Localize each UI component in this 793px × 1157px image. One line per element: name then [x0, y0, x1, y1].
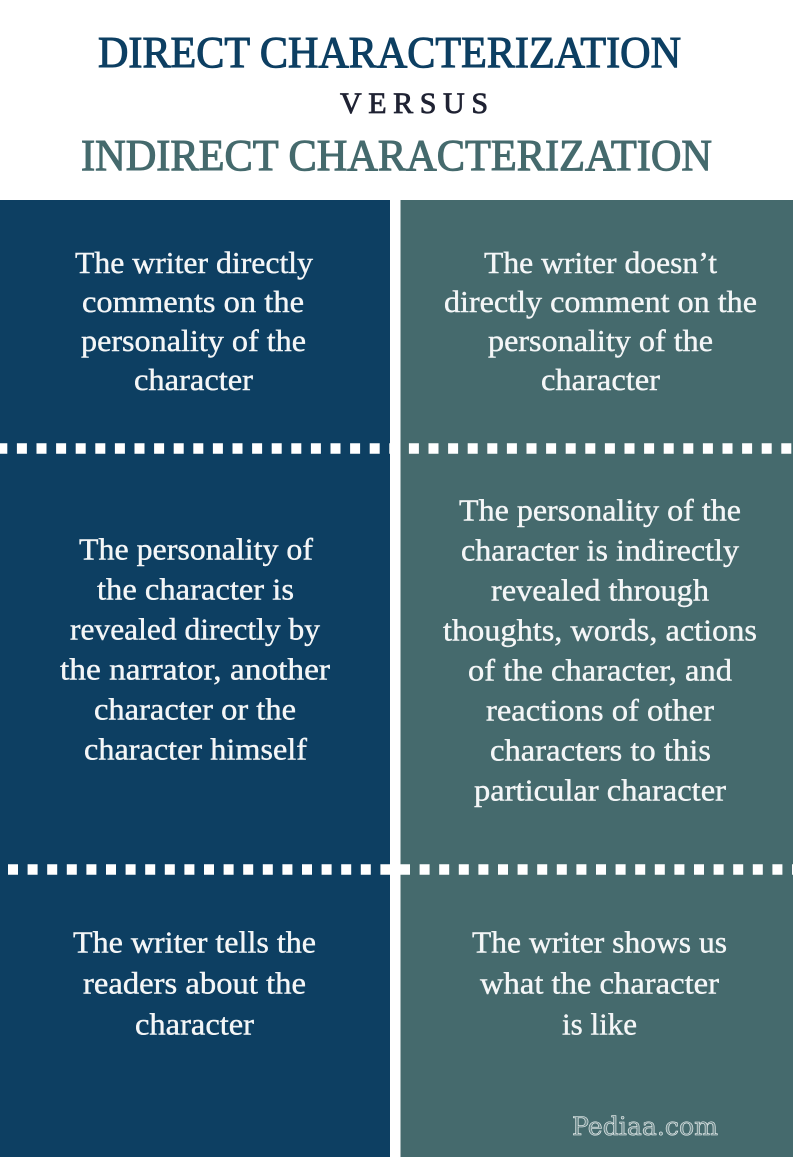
text: indirect row 2: of the character, and: [468, 652, 733, 688]
subtitle: versus: VERSUS: [340, 87, 488, 120]
text: indirect row 2: revealed through: [491, 572, 710, 608]
text: indirect row 1: directly comment on the: [444, 284, 757, 319]
text: direct row 3: The writer tells the: [73, 924, 316, 960]
text: indirect row 2: particular character: [474, 772, 727, 808]
text: indirect row 3: what the character: [480, 966, 720, 1000]
text: direct row 2: the character is: [97, 572, 294, 606]
text: direct row 1: personality of the: [81, 323, 306, 358]
text: direct row 1: character: [134, 362, 254, 397]
text: direct row 1: comments on the: [82, 284, 304, 319]
text: direct row 2: revealed directly by: [70, 612, 321, 646]
text: indirect row 1: character: [541, 362, 661, 397]
text: direct row 2: character or the: [94, 692, 296, 726]
text: indirect row 2: character is indirectly: [461, 532, 740, 568]
text: direct row 2: The personality of: [79, 532, 314, 566]
text: indirect row 3: The writer shows us: [472, 924, 727, 960]
text: direct row 2: the narrator, another: [60, 652, 331, 686]
text: indirect row 3: is like: [562, 1006, 637, 1042]
text: indirect row 2: characters to this: [490, 732, 711, 768]
text: indirect row 1: personality of the: [488, 323, 713, 358]
title: direct characterization: DIRECT CHARACTERIZATION: [98, 28, 681, 77]
title: indirect characterization: INDIRECT CHARACTERIZATION: [81, 131, 712, 180]
text: indirect row 2: thoughts, words, actions: [443, 612, 757, 648]
text: indirect row 2: reactions of other: [486, 692, 715, 728]
text: direct row 3: character: [135, 1006, 255, 1042]
title block: [81, 28, 712, 180]
text: indirect row 1: [444, 245, 757, 397]
text: indirect row 2: The personality of the: [459, 492, 741, 528]
text: indirect row 3: [472, 924, 727, 1042]
text: direct row 3: [73, 924, 316, 1042]
text: indirect row 2: [443, 492, 757, 808]
panel: indirect column background: [400, 200, 793, 1157]
watermark: Pediaa.com: Pediaa.com: [572, 1112, 718, 1141]
text: direct row 1: The writer directly: [75, 245, 313, 280]
text: direct row 1: [75, 245, 313, 397]
panel: direct column background: [0, 200, 390, 1157]
text: direct row 2: [60, 532, 331, 766]
text: direct row 3: readers about the: [83, 966, 306, 1000]
text: direct row 2: character himself: [84, 732, 308, 766]
text: indirect row 1: The writer doesn’t: [484, 245, 717, 280]
